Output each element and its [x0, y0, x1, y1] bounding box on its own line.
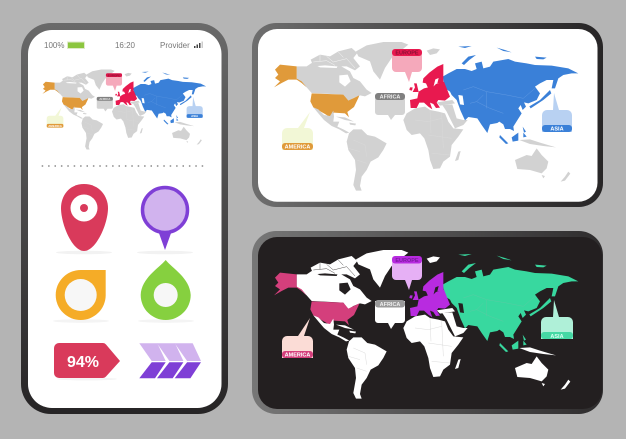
callout: Africa: AFRICA — [380, 95, 400, 101]
callout: Africa — [375, 300, 405, 329]
phone callout: Africa: AFRICA — [99, 97, 111, 101]
callout: Europe — [392, 256, 422, 290]
phone callout: Asia: ASIA — [191, 114, 199, 118]
battery icon — [67, 42, 85, 49]
callout: Asia — [542, 93, 572, 133]
signal icon — [194, 42, 203, 48]
status bar: 100% — [44, 41, 64, 50]
phone callout: America: AMERICA — [48, 124, 63, 128]
callout: America: AMERICA — [285, 145, 310, 151]
icon: red map pin — [56, 184, 112, 254]
callout: America — [282, 318, 313, 359]
phone callout: Asia — [187, 97, 203, 118]
callout: Asia: ASIA — [550, 334, 564, 340]
phone callout: America — [47, 107, 63, 128]
phone callout: Africa — [97, 97, 113, 111]
status bar — [44, 41, 203, 50]
phone callout: Europe: EUROPE — [108, 73, 120, 77]
phone callout: Europe — [106, 73, 122, 91]
icon: orange pin — [53, 270, 109, 323]
callout: Europe: EUROPE — [395, 51, 419, 57]
dotted divider — [42, 165, 207, 167]
status bar: 16:20 — [115, 41, 136, 50]
icon: triple chevrons — [139, 343, 201, 378]
status bar: Provider — [160, 41, 190, 50]
phone frame — [21, 23, 228, 414]
percentage tag: 94% — [67, 354, 99, 371]
icon: green pin — [138, 260, 194, 323]
phone world map — [42, 69, 206, 149]
callout: America: AMERICA — [285, 353, 310, 359]
callout: Africa: AFRICA — [380, 302, 400, 308]
callout: Europe — [392, 49, 422, 82]
icon: purple map pin — [137, 188, 193, 254]
callout: America — [282, 112, 313, 151]
panel: dark map — [252, 231, 603, 414]
callout: Europe: EUROPE — [395, 258, 419, 264]
dark world map — [274, 250, 578, 399]
callout: Asia: ASIA — [550, 127, 564, 133]
panel: light map — [252, 23, 603, 207]
percentage tag — [54, 343, 120, 380]
callout: Africa — [375, 93, 405, 120]
callout: Asia — [541, 300, 573, 340]
light world map — [274, 42, 578, 191]
